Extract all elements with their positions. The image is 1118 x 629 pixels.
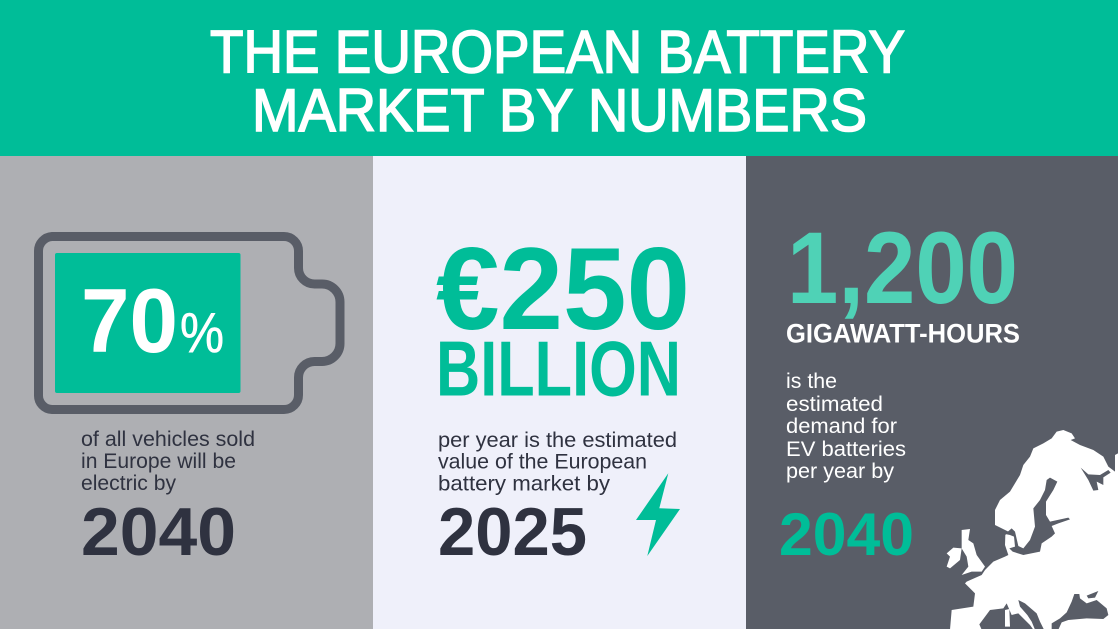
text: market value description: value of the European (438, 450, 647, 474)
text: market value description: per year is the estimated (438, 429, 677, 452)
sea: Black Sea (1052, 594, 1108, 629)
text: demand description: per year by (786, 460, 895, 483)
text: demand description: is the (786, 370, 837, 393)
text: vehicles description: electric by (81, 472, 177, 495)
stat: 1,200: 1,200 (787, 211, 1018, 325)
year: 2040 green: 2040 (779, 501, 914, 568)
stat: 250 euro billion (436, 223, 690, 412)
sea: Mediterranean (979, 603, 1033, 629)
title (210, 18, 905, 144)
text: demand description: estimated (786, 393, 883, 416)
text: market value description (438, 429, 677, 496)
island: Ireland (947, 548, 962, 568)
sea: White Sea (1081, 468, 1111, 491)
sea: Adriatic (1018, 600, 1044, 629)
text: demand description: demand for (786, 415, 897, 438)
sea: Azov (1087, 591, 1098, 598)
text: demand description: EV batteries (786, 438, 906, 461)
header band with title (0, 0, 1118, 156)
text: vehicles description: in Europe will be (81, 450, 236, 473)
label: gigawatt-hours: GIGAWATT-HOURS (786, 318, 1020, 348)
stat: 70%: % (180, 301, 224, 365)
island: Great Britain (962, 529, 985, 575)
year: 2025: 2025 (438, 494, 587, 570)
island: Corsica and Sardinia (1005, 609, 1010, 627)
sea: Baltic (1005, 478, 1070, 555)
panel: 70 percent electric vehicles (0, 156, 373, 629)
text: vehicles description (81, 428, 255, 495)
stat: 250 euro billion: BILLION (436, 324, 681, 412)
title: THE EUROPEAN BATTERY (210, 18, 905, 86)
panel: 250 billion market value (373, 156, 746, 629)
text: vehicles description: of all vehicles sold (81, 428, 255, 451)
stat: 250 euro billion: €250 (436, 223, 690, 354)
panel: 1200 gigawatt-hours demand (746, 156, 1118, 629)
text: market value description: battery market by (438, 472, 611, 496)
text: demand description (786, 370, 906, 483)
title: MARKET BY NUMBERS (252, 77, 867, 144)
icon: battery (38, 236, 340, 410)
stat: 70%: 70 (81, 271, 178, 372)
icon: map of Europe (947, 430, 1118, 629)
southern seas and islands (947, 529, 1108, 629)
icon: lightning bolt (636, 473, 680, 556)
year: 2040: 2040 (81, 494, 236, 570)
